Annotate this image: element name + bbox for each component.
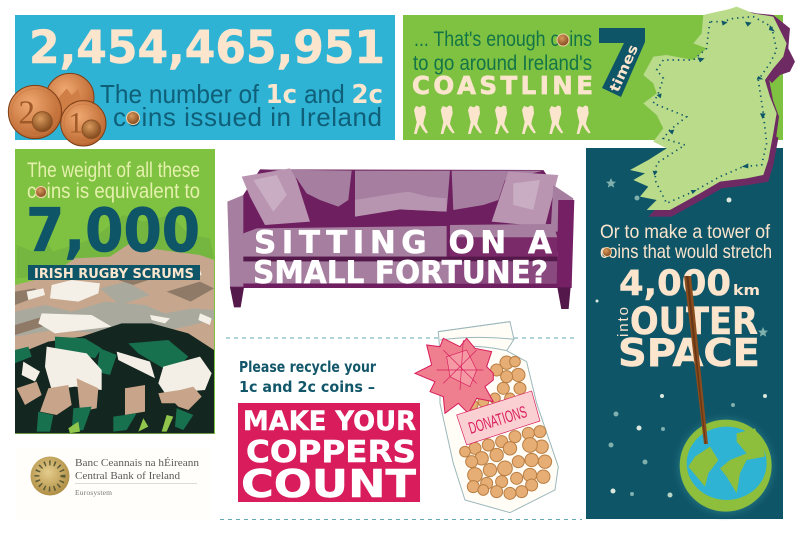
icon: euro cent coins: 2 xyxy=(18,94,35,131)
icon: small coin in text xyxy=(36,186,46,198)
stars xyxy=(596,178,768,498)
caption: issued in Ireland: coins issued in Ireland xyxy=(113,102,382,132)
text: 4,000: 4,000 xyxy=(619,264,731,304)
icon: gold seal xyxy=(30,456,70,496)
title: sitting on a small fortune xyxy=(253,225,552,291)
panel: make your coppers count: COUNT xyxy=(241,462,416,506)
text: outer: OUTER xyxy=(630,300,758,343)
panel: coastline xyxy=(403,15,783,140)
illustration: scrum xyxy=(15,215,214,433)
logo: Central Bank of Ireland xyxy=(15,447,210,519)
text: bank name Irish: Banc Ceannais na hÉireann xyxy=(75,457,200,469)
text: space: SPACE xyxy=(618,331,760,375)
figure: 7,000: 7,000 xyxy=(26,196,200,266)
icon: euro cent coins: 1 xyxy=(68,107,83,140)
title: sitting on a small fortune: SITTING ON A xyxy=(254,225,552,261)
text: around Ireland's: to go around Ireland's xyxy=(413,51,592,75)
icons: walkers xyxy=(414,105,591,134)
illustration: donations jar xyxy=(415,322,558,513)
coins in jar xyxy=(460,356,552,499)
text: km: km xyxy=(733,283,760,299)
caption: number of coins: The number of 1c and 2c xyxy=(100,79,383,110)
icon: small coin in text xyxy=(557,34,569,46)
icons: route arrows xyxy=(653,21,775,194)
panel: make your coppers count: MAKE YOUR xyxy=(243,406,416,437)
text: times: times xyxy=(607,42,642,95)
icon: ribbon bow xyxy=(415,338,493,413)
divider: dashed top xyxy=(226,337,576,339)
illustration: sofa xyxy=(227,168,574,309)
text: enough coins: ... That's enough coins xyxy=(414,27,592,51)
text: coastline: COASTLINE xyxy=(412,71,593,100)
illustration: earth xyxy=(671,411,781,521)
headline number: 2,454,465,951 xyxy=(29,21,385,74)
icon: euro cent coins xyxy=(8,73,106,146)
icon: small coin in text xyxy=(126,112,140,124)
text: Eurosystem: Eurosystem xyxy=(75,488,112,497)
label: donations: DONATIONS xyxy=(466,402,529,438)
sofa legs xyxy=(230,287,571,309)
panel: make your coppers count xyxy=(238,403,420,506)
map: Ireland xyxy=(630,7,795,217)
text: 1c and 2c: 1c and 2c coins – xyxy=(239,378,375,396)
label: donations xyxy=(457,391,540,445)
banner: Irish rugby scrums: IRISH RUGBY SCRUMS xyxy=(34,267,194,282)
icon: small coin in text xyxy=(602,248,612,256)
numeral: seven xyxy=(599,28,645,97)
text: weight line one: The weight of all these xyxy=(27,159,200,182)
text: bank name English: Central Bank of Ireland xyxy=(75,470,181,482)
text: please recycle: Please recycle your xyxy=(239,358,376,376)
title: sitting on a small fortune: SMALL FORTUNE? xyxy=(253,255,548,291)
illustration: coin tower xyxy=(684,276,708,444)
text: would stretch: coins that would stretch xyxy=(600,241,772,263)
text: into: into xyxy=(615,307,632,337)
text: weight line two: coins is equivalent to xyxy=(27,180,200,203)
divider: dashed bottom xyxy=(220,518,582,520)
panel: rugby scrums xyxy=(15,149,215,434)
panel: make your coppers count: COPPERS xyxy=(246,435,416,470)
route: dotted coast path xyxy=(653,17,777,203)
panel: outer space xyxy=(586,148,783,521)
panel: coins issued xyxy=(15,15,395,140)
text: tower of: Or to make a tower of xyxy=(600,221,771,243)
